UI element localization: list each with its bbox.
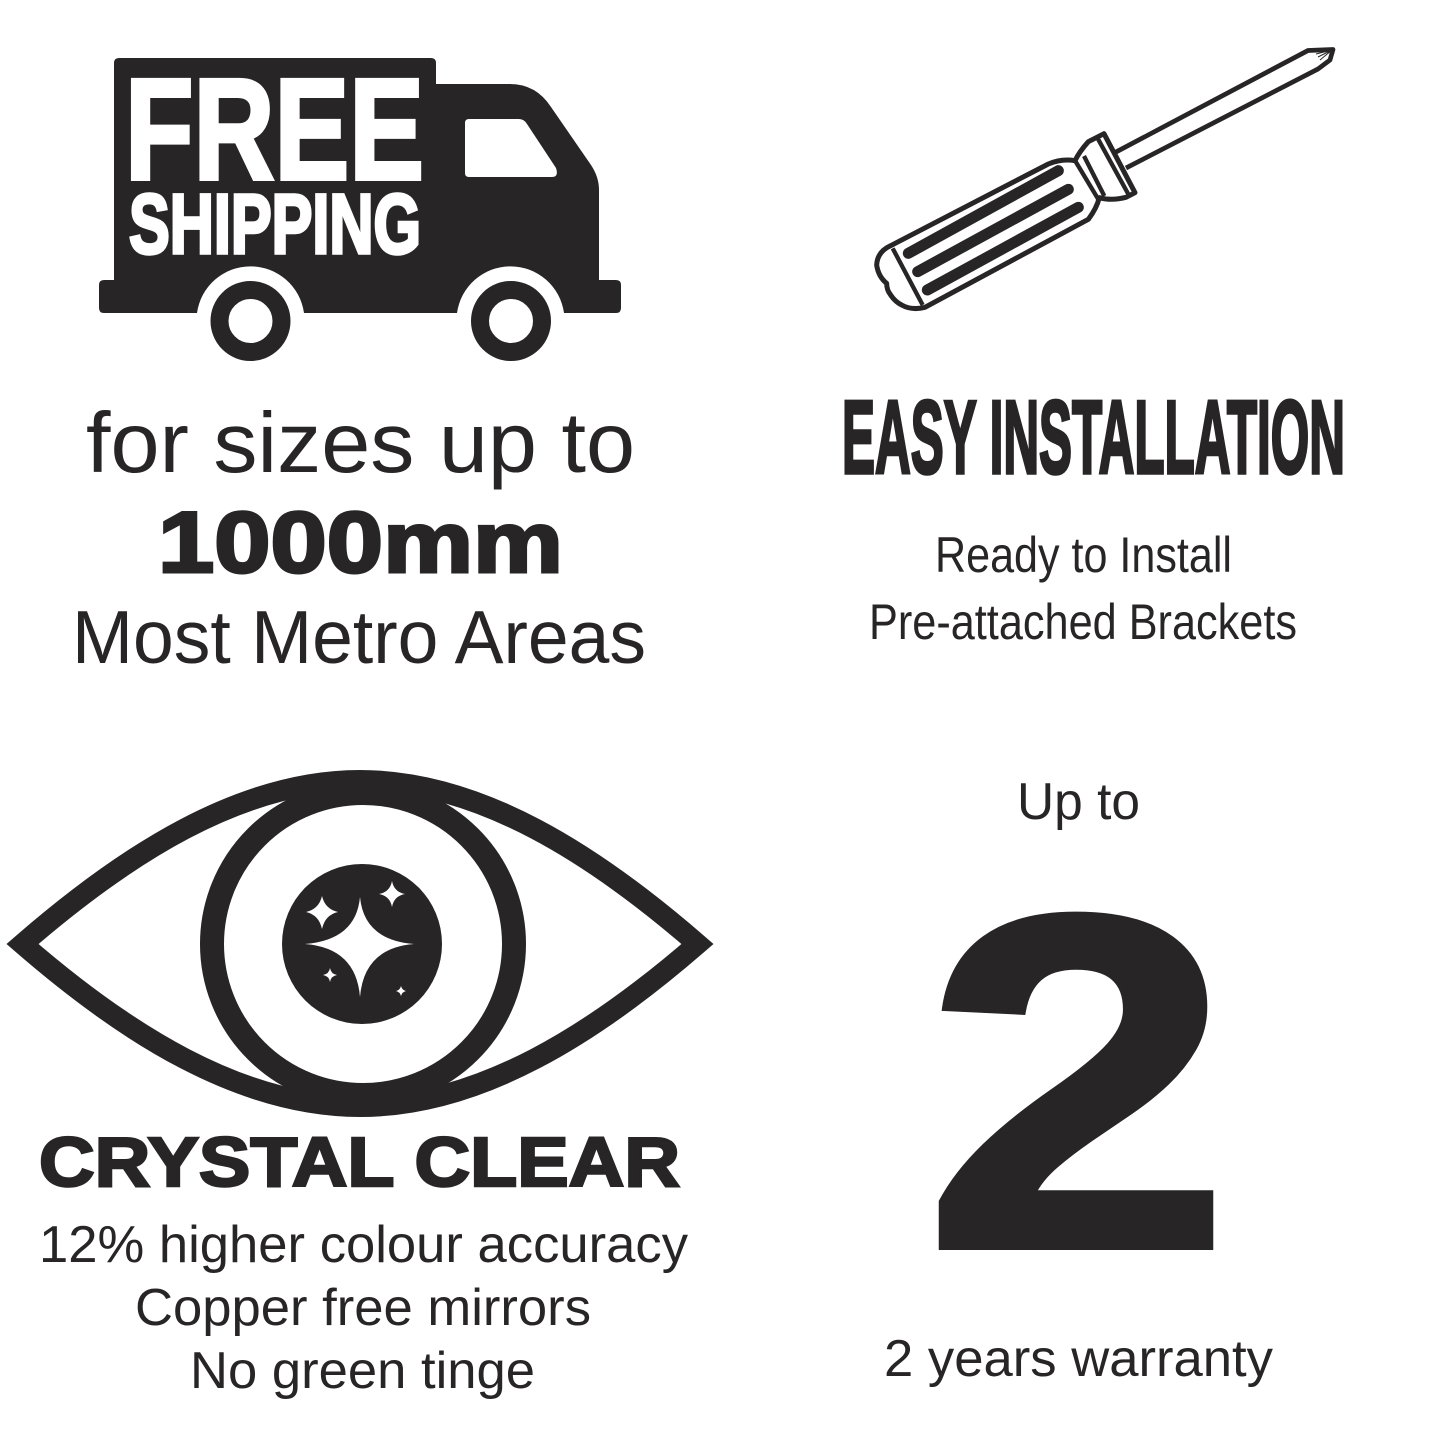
icon: delivery truck bbox=[99, 49, 621, 352]
shipping text: 1000mm: 1000mm bbox=[158, 495, 563, 591]
icon: eye bbox=[22, 780, 698, 1106]
truck text: shipping: SHIPPING bbox=[129, 177, 421, 271]
screwdriver handle bbox=[877, 134, 1135, 309]
crystal text: accuracy: 12% higher colour accuracy bbox=[39, 1216, 688, 1274]
pupil bbox=[282, 864, 442, 1024]
warranty text: up to: Up to bbox=[1017, 773, 1140, 831]
sparkles bbox=[305, 881, 414, 997]
panel: crystal clear bbox=[22, 780, 698, 1400]
crystal clear heading: CRYSTAL CLEAR bbox=[39, 1123, 680, 1201]
icon: screwdriver bbox=[877, 50, 1333, 309]
eye outline bbox=[22, 780, 698, 1106]
warranty number: 2 bbox=[923, 816, 1232, 1348]
screwdriver shaft bbox=[1116, 50, 1333, 168]
panel: free shipping bbox=[72, 49, 646, 679]
iris ring bbox=[212, 793, 514, 1095]
handle stripes bbox=[908, 171, 1078, 290]
panel: warranty bbox=[884, 773, 1273, 1388]
screwdriver tip detail bbox=[1316, 50, 1332, 60]
left wheel bbox=[220, 290, 282, 352]
installation text: brackets: Pre-attached Brackets bbox=[869, 594, 1297, 650]
warranty text: years: 2 years warranty bbox=[884, 1330, 1273, 1388]
panel: easy installation bbox=[842, 50, 1345, 650]
installation text: ready: Ready to Install bbox=[935, 527, 1232, 583]
truck window bbox=[465, 119, 557, 177]
handle divider lines bbox=[893, 138, 1129, 305]
truck text: free: FREE bbox=[125, 49, 424, 210]
crystal text: tinge: No green tinge bbox=[190, 1342, 535, 1400]
shipping text: metro areas: Most Metro Areas bbox=[72, 595, 646, 679]
truck body bbox=[99, 58, 621, 313]
crystal text: copper: Copper free mirrors bbox=[135, 1279, 591, 1337]
right wheel bbox=[480, 290, 542, 352]
shipping text: sizes: for sizes up to bbox=[86, 396, 635, 491]
handle outline bbox=[877, 134, 1135, 309]
